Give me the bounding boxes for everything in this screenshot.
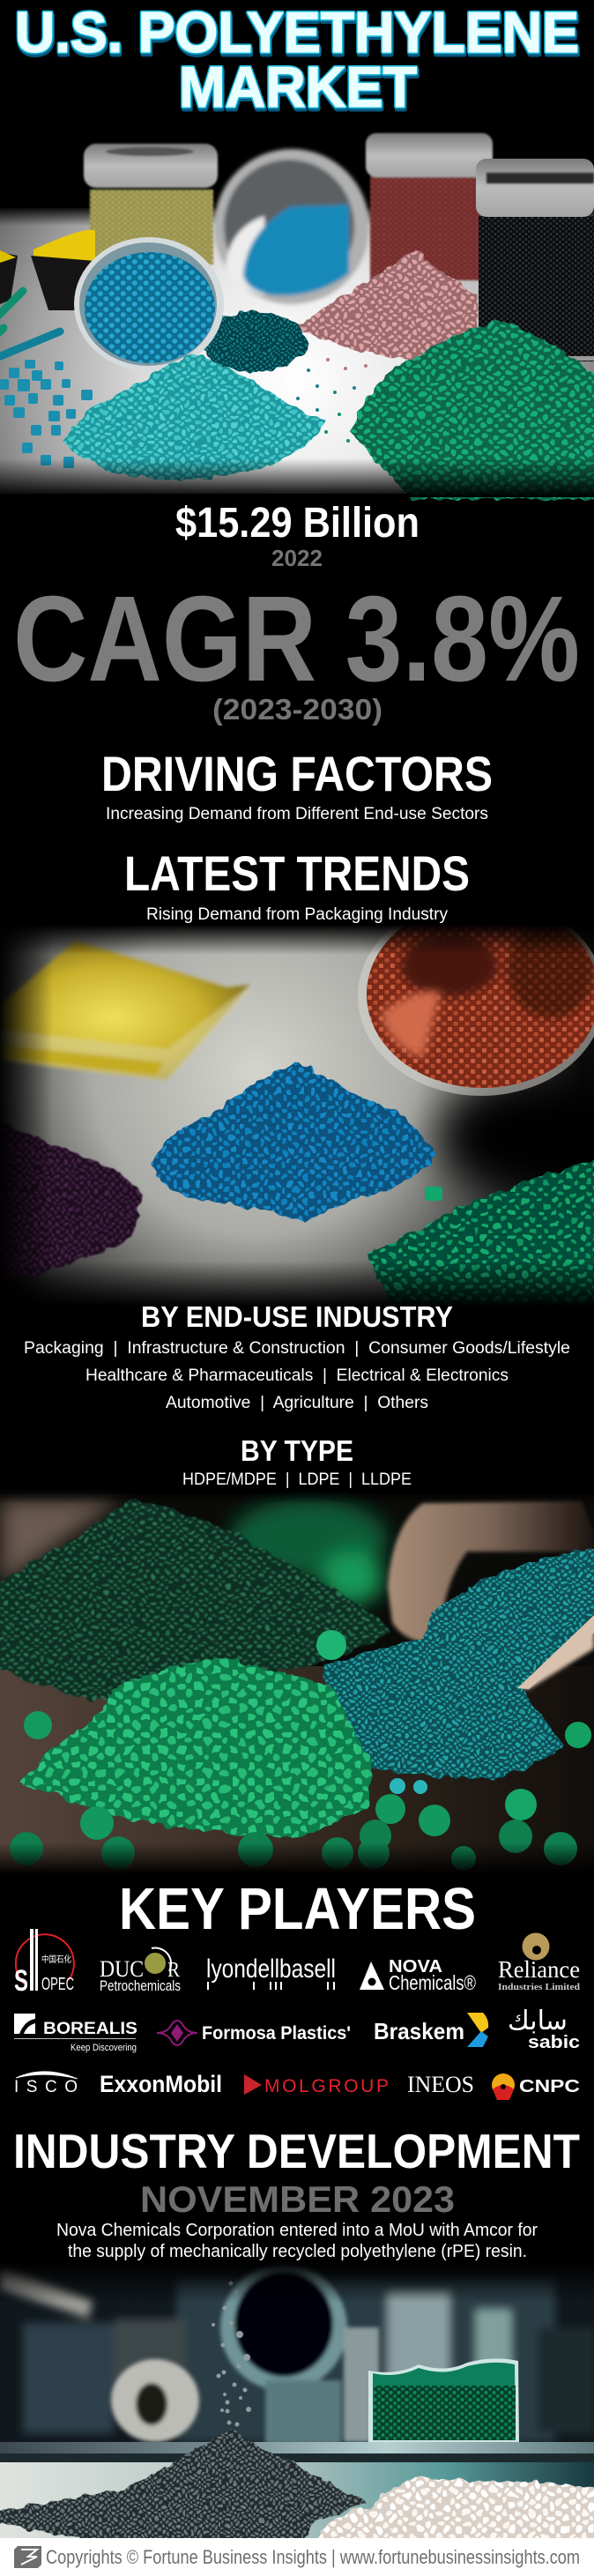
logo: Braskem: Braskem (374, 2018, 464, 2044)
end-use segments (24, 1339, 570, 1412)
logo: Nova Chemicals (360, 1957, 476, 1994)
green pellet tank (368, 2358, 519, 2442)
end-use segments: Healthcare & Pharmaceuticals | Electrical & Electronics (85, 1366, 509, 1385)
blurred machinery (0, 2266, 594, 2442)
orange bowl (358, 927, 594, 1096)
yellow tray (0, 941, 251, 1080)
title shadow layer: U.S. POLYETHYLENE (16, 3, 580, 67)
title text: U.S. POLYETHYLENE (15, 0, 579, 64)
ring opening (220, 2264, 379, 2444)
dark teal pellet pile (201, 312, 307, 372)
glass cup with blue pellets (74, 237, 224, 371)
scattered blue cubes (0, 360, 93, 468)
logo: ISCO: ISCO (14, 2078, 78, 2096)
blurred background pellets (229, 1499, 388, 1604)
teal flow and teal pellet pile (323, 1547, 594, 1779)
green balls (10, 1630, 591, 1871)
teal pellets (390, 1778, 427, 1794)
fourth photo: recycling machinery and pellets (0, 2262, 594, 2547)
logo: ExxonMobil: ExxonMobil (100, 2071, 222, 2097)
teal pellet pile (63, 353, 324, 480)
title shadow layer (16, 3, 580, 122)
logo: Sabic (508, 2006, 580, 2052)
logo: Braskem (374, 2013, 488, 2047)
title text (15, 0, 579, 119)
shadow right (436, 1076, 594, 1199)
bag front edge (517, 1615, 594, 1689)
development text (56, 2221, 538, 2261)
logo: Ducor Petrochemicals: Petrochemicals (100, 1977, 181, 1994)
heading: key players: KEY PLAYERS (119, 1876, 476, 1942)
heading: latest trends: LATEST TRENDS (124, 845, 470, 901)
logo: Borealis: BOREALIS (43, 2020, 137, 2038)
development text: Nova Chemicals Corporation entered into a MoU with Amcor for (56, 2221, 538, 2240)
heading: driving factors: DRIVING FACTORS (101, 746, 493, 801)
yellow powder bowls (0, 230, 95, 310)
floor surface (0, 2442, 594, 2454)
second photo: coloured pellets on table (0, 897, 594, 1314)
logo: Reliance Industries: Reliance (498, 1956, 580, 1983)
top fade (0, 2262, 594, 2303)
third photo: green and teal pellets (0, 1488, 594, 1874)
logo: Ducor Petrochemicals (100, 1948, 181, 1994)
logo: Borealis (14, 2014, 137, 2053)
jar: red pellets (366, 133, 493, 280)
title shadow layer: MARKET (180, 57, 418, 122)
purple pellet pile (0, 1120, 143, 1283)
mirror bowl with blue pellets (214, 149, 369, 304)
logo: Formosa Plastics (157, 2021, 351, 2045)
jar: black pellets (476, 159, 594, 361)
base year: 2022 (271, 545, 323, 571)
logo: Sabic: sabic (528, 2033, 580, 2052)
grey pellet pile (0, 2431, 368, 2543)
logo: Nova Chemicals: Chemicals® (389, 1971, 476, 1994)
white pellet pile (318, 2475, 594, 2538)
falling pellets (212, 2282, 251, 2426)
dark green pellet mountain (0, 1499, 392, 1701)
title text: MARKET (179, 55, 417, 119)
jar: yellow pellets (84, 144, 218, 264)
title cyan outline layer (15, 0, 579, 119)
logo: Nova Chemicals: NOVA (389, 1957, 442, 1977)
top background (0, 1494, 594, 1666)
icon: Fortune Business Insights logo (14, 2546, 41, 2568)
logo: Reliance Industries: Industries Limited (498, 1982, 580, 1992)
market value: $15.29 Billion (175, 500, 420, 547)
logo: Sinopec: 中国石化 (41, 1954, 71, 1965)
end-use segments: Packaging | Infrastructure & Construction | Consumer Goods/Lifestyle (24, 1339, 570, 1358)
pink pellet pile (295, 250, 478, 360)
latest trends text: Rising Demand from Packaging Industry (146, 905, 448, 924)
logo: Sinopec: OPEC (41, 1975, 74, 1994)
type segments: HDPE/MDPE | LDPE | LLDPE (182, 1470, 412, 1489)
logo: Sabic: سابك (508, 2006, 568, 2036)
white gear wheel (111, 2359, 199, 2442)
bright green pellet pile (19, 1657, 370, 1836)
logo: LyondellBasell: lyondellbasell (206, 1954, 336, 1984)
logo: Borealis: Keep Discovering (71, 2043, 137, 2053)
edge fades (0, 925, 594, 1307)
green pellet (425, 1187, 442, 1201)
footer bar (0, 2538, 594, 2576)
green pellet pile (351, 319, 594, 499)
blue pellet pile (152, 1061, 435, 1221)
development text: the supply of mechanically recycled polyethylene (rPE) resin. (68, 2242, 527, 2261)
end-use segments: Automotive | Agriculture | Others (166, 1394, 428, 1412)
title cyan outline layer: MARKET (179, 55, 417, 119)
heading: by end-use industry: BY END-USE INDUSTRY (141, 1300, 453, 1333)
green pellet pile (368, 1158, 594, 1314)
development date: NOVEMBER 2023 (140, 2178, 455, 2220)
logo: MOL Group: MOLGROUP (264, 2076, 389, 2096)
logo: Sinopec (14, 1929, 74, 1998)
logo: CNPC: CNPC (519, 2077, 580, 2096)
driving factors text: Increasing Demand from Different End-use Sectors (106, 805, 488, 823)
heading: by type: BY TYPE (241, 1434, 353, 1467)
logo: Sinopec: S (14, 1964, 28, 1998)
edge fades (0, 1488, 594, 1874)
logo: Ineos: INEOS (407, 2072, 474, 2097)
bottom fade (0, 458, 594, 497)
title (15, 0, 580, 122)
logo: Reliance Industries (498, 1932, 580, 1992)
logo: Formosa Plastics: Formosa Plastics' (202, 2023, 351, 2044)
pellet sticks (0, 291, 60, 357)
scattered pellets on white table (296, 358, 368, 443)
logo: Ducor Petrochemicals: DUC (100, 1956, 144, 1982)
logo: Ducor Petrochemicals: R (167, 1959, 180, 1982)
logo: CNPC (492, 2073, 580, 2100)
title cyan outline layer: U.S. POLYETHYLENE (15, 0, 579, 64)
hero photo: polyethylene pellets and jars (0, 133, 594, 499)
forecast period: (2023-2030) (212, 693, 382, 726)
tan bag lip (388, 1500, 594, 1689)
